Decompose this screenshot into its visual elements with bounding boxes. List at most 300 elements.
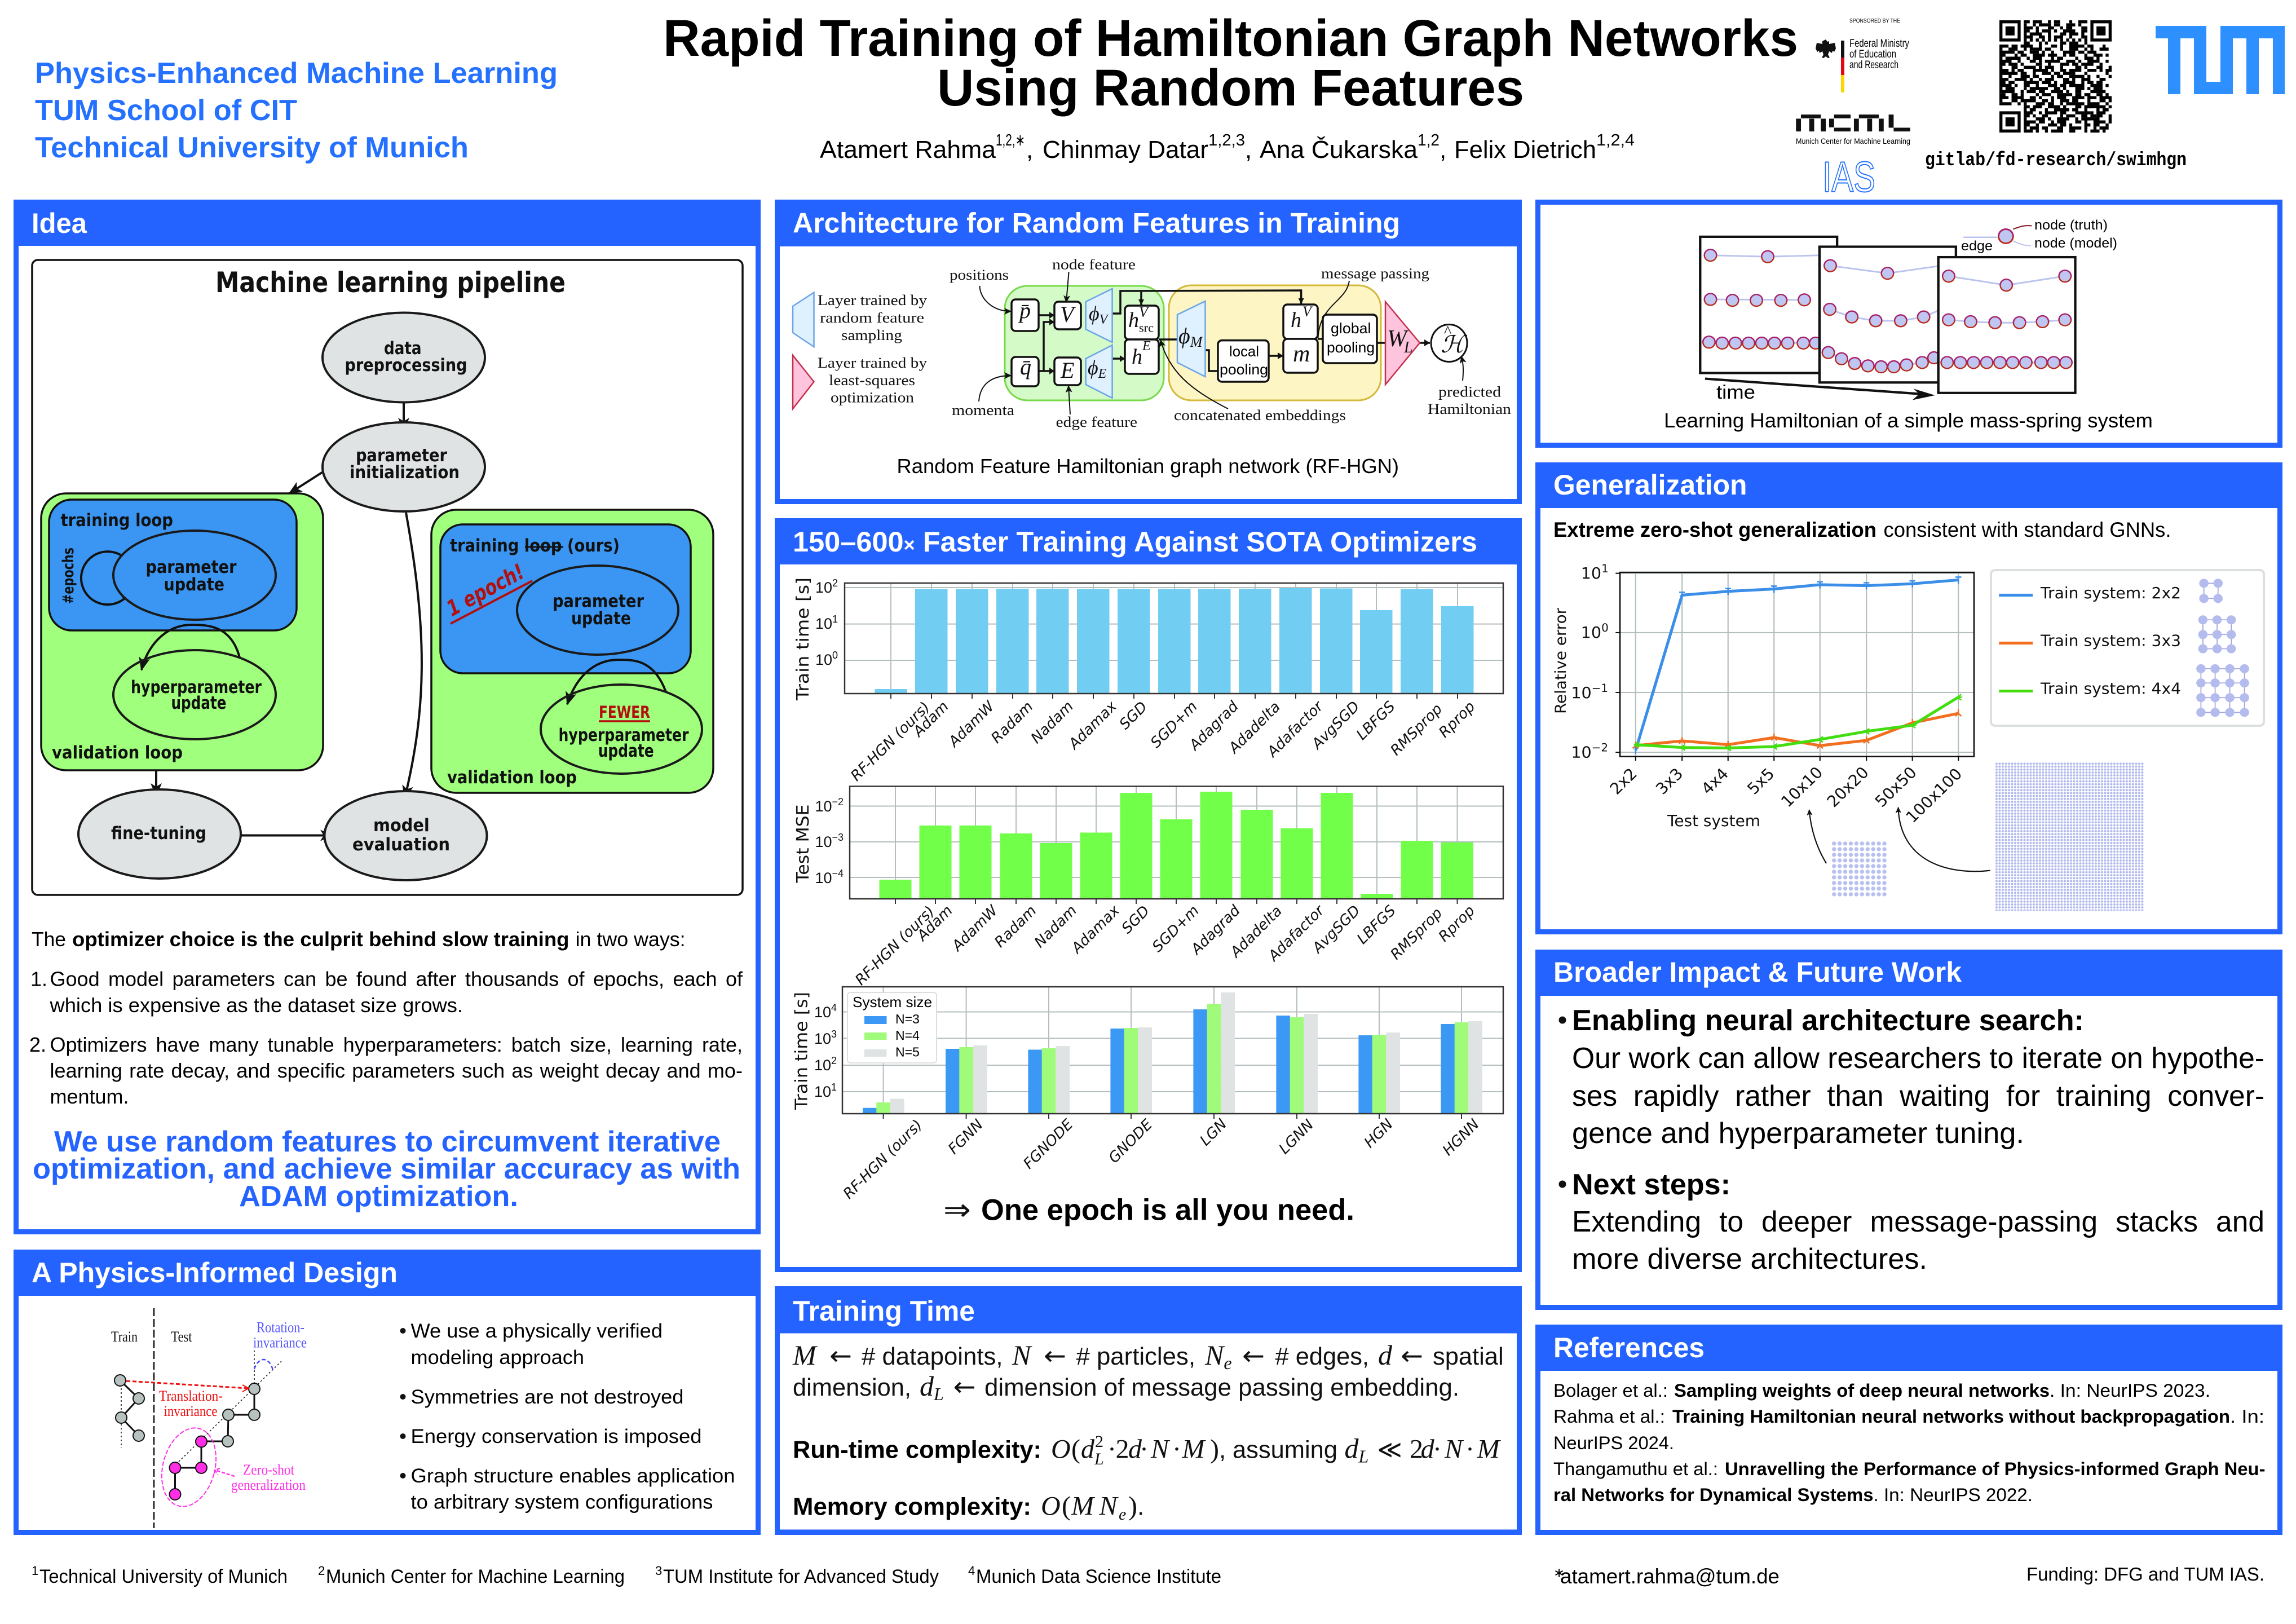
text: variable definitions: d xyxy=(920,1370,934,1402)
diagram: RF-HGN architecture: edge feature xyxy=(1056,414,1137,430)
text: run-time complexity: · xyxy=(1465,1435,1474,1464)
diagram: RF-HGN architecture: E xyxy=(1098,367,1107,381)
list: next steps: Extending to deeper message-passing stacks and xyxy=(1572,1205,2264,1238)
list: neural architecture search: ses rapidly rather than waiting for training conver- xyxy=(1572,1079,2264,1112)
frame: third time step xyxy=(1939,257,2076,393)
text: reference list: Unravelling the Performance of Physics-informed Graph Neu- xyxy=(1725,1459,2266,1479)
panel: mass-spring system xyxy=(1535,200,2282,448)
panel: Broader Impact & Future Work xyxy=(1535,950,2282,1310)
right loop box: our validation loop: 1 epoch! xyxy=(442,559,528,621)
list: neural architecture search: gence and hyperparameter tuning. xyxy=(1572,1116,2024,1149)
logo: Federal Ministry of Education and Research xyxy=(1816,18,1909,92)
bar chart: test MSE by optimizer: −3 xyxy=(832,832,844,843)
text: reference list: Thangamuthu et al.: xyxy=(1553,1459,1718,1479)
node: fine-tuning: fine-tuning xyxy=(111,823,206,844)
node: parameter initialization: initialization xyxy=(350,462,460,483)
authors xyxy=(820,131,1635,164)
bar chart: train time by optimizer: Adam xyxy=(909,698,952,741)
bar chart: train time by model: HGN xyxy=(1361,1116,1397,1151)
legend: system size xyxy=(847,992,937,1063)
diagram: RF-HGN architecture: h xyxy=(1128,308,1139,332)
line chart: relative error vs test system: 4x4 xyxy=(1698,765,1732,798)
authors: 1,2 xyxy=(1418,131,1440,149)
left loop box: validation loop: parameter xyxy=(145,557,237,577)
diagram: RF-HGN architecture: m xyxy=(1293,341,1310,367)
repository link: gitlab/fd-research/swimhgn xyxy=(1925,150,2187,171)
bar chart: train time by model: HGNN xyxy=(1440,1116,1483,1159)
logo: MCML: Munich Center for Machine Learning xyxy=(1796,136,1910,145)
bar chart: test MSE by optimizer: SGD xyxy=(1119,903,1153,937)
right loop box: our validation loop: hyperparameter xyxy=(558,725,689,745)
bar chart: test MSE by optimizer: AvgSGD xyxy=(1309,902,1364,957)
diagram: RF-HGN architecture: ℋ xyxy=(1441,332,1468,358)
callout: key message xyxy=(33,1126,740,1213)
text: memory complexity: Memory complexity: xyxy=(793,1493,1031,1521)
logo: Federal Ministry of Education and Research: and Research xyxy=(1849,59,1898,71)
list: design bullets: Symmetries are not destroyed xyxy=(410,1386,683,1408)
text: reference list: . In: xyxy=(2230,1406,2264,1427)
panel: 150-600x faster training xyxy=(775,518,1522,1272)
legend: train systems: Train system: 3x3 xyxy=(2040,632,2181,650)
heading: Idea: Idea xyxy=(32,208,87,239)
bar chart: train time by model: LGN xyxy=(1197,1116,1230,1149)
bar chart: train time by model: 10 xyxy=(814,1083,831,1100)
diagram: RF-HGN architecture xyxy=(950,256,1511,430)
diagram: RF-HGN architecture: ^ xyxy=(1444,323,1451,341)
left loop box: validation loop: hyperparameter xyxy=(131,677,262,698)
text: generalization summary: consistent with standard GNNs. xyxy=(1883,518,2171,541)
right loop box: our validation loop: FEWER xyxy=(599,703,650,722)
line chart: relative error vs test system: 10 xyxy=(1581,564,1601,582)
line chart: relative error vs test system: 1 xyxy=(1601,562,1609,575)
callout: key message: ADAM optimization. xyxy=(239,1180,518,1213)
bar chart: test MSE by optimizer: LBFGS xyxy=(1354,902,1399,948)
text: variable definitions: e xyxy=(1224,1353,1232,1373)
frame: first time step xyxy=(1700,237,1837,373)
bar chart: train time by optimizer: Rprop xyxy=(1436,698,1478,741)
panel: Architecture for Random Features in Training xyxy=(775,200,1522,504)
logo: Federal Ministry of Education and Research: Federal Ministry xyxy=(1849,38,1909,50)
text: reference list xyxy=(1553,1380,2266,1505)
text: run-time complexity: · xyxy=(1433,1435,1442,1464)
header: institution text: TUM School of CIT xyxy=(35,94,297,127)
diagram: RF-HGN architecture: momenta xyxy=(952,402,1015,418)
text: run-time complexity: L xyxy=(1094,1450,1104,1468)
diagram: RF-HGN architecture: L xyxy=(1403,339,1413,356)
diagram: RF-HGN architecture: E xyxy=(1142,339,1151,354)
diagram: graph symmetries: Translation- xyxy=(159,1388,223,1404)
title xyxy=(663,10,1798,117)
bar chart: train time by model: 10 xyxy=(814,1057,831,1074)
text: memory complexity: . xyxy=(1137,1493,1144,1521)
node: model evaluation: evaluation xyxy=(352,835,450,855)
footer: affiliations: Munich Center for Machine Learning xyxy=(326,1566,625,1587)
legend: layer types xyxy=(793,292,927,409)
node: parameter initialization: parameter xyxy=(356,445,448,466)
text: reference list: NeurIPS 2024. xyxy=(1553,1433,1674,1453)
footer: affiliations: 1 xyxy=(32,1564,38,1578)
diagram: RF-HGN architecture: ϕ xyxy=(1089,302,1100,325)
text: variable definitions xyxy=(792,1339,1504,1404)
text: run-time complexity: d xyxy=(1344,1432,1359,1464)
bar chart: train time by model: 2 xyxy=(831,1055,837,1066)
bar chart: train time by model xyxy=(792,987,1503,1202)
bar chart: test MSE by optimizer: Adam xyxy=(913,902,956,945)
diagram: RF-HGN architecture: V xyxy=(1060,302,1076,327)
right loop box: our validation loop: parameter xyxy=(553,591,644,611)
line chart: relative error vs test system xyxy=(1571,562,1974,827)
bar chart: train time by optimizer: Adamax xyxy=(1065,698,1120,753)
footer: contact email: ∗ xyxy=(1553,1565,1565,1581)
text: optimizer explanation: Good model parameters can be found after thousands of epochs, each of xyxy=(50,968,743,990)
text: run-time complexity: L xyxy=(1358,1446,1368,1466)
node: parameter initialization xyxy=(323,422,485,511)
bar chart: train time by model: FGNODE xyxy=(1020,1116,1077,1172)
text: variable definitions: d xyxy=(1378,1339,1393,1371)
text: reference list: Sampling weights of deep neural networks xyxy=(1674,1380,2050,1401)
bar chart: train time by model: Train time [s] xyxy=(792,992,812,1110)
line chart: relative error vs test system: 10x10 xyxy=(1777,763,1826,811)
text: optimizer explanation: in two ways: xyxy=(576,928,686,951)
text: run-time complexity: O xyxy=(1051,1435,1071,1464)
text: reference list: . In: NeurIPS 2023. xyxy=(2050,1380,2210,1401)
diagram: graph symmetries: Zero-shot xyxy=(243,1462,295,1478)
label: time: time xyxy=(1716,382,1755,403)
text: optimizer explanation: 2. xyxy=(29,1033,46,1056)
text: run-time complexity: M xyxy=(1182,1435,1207,1464)
text: optimizer explanation: learning rate decay, and specific parameters such as weight decay and mo- xyxy=(50,1059,743,1082)
QR code xyxy=(1999,20,2112,133)
footer: affiliations: TUM Institute for Advanced Study xyxy=(663,1566,939,1587)
title: Rapid Training of Hamiltonian Graph Networks xyxy=(663,10,1798,67)
list: design bullets xyxy=(400,1320,735,1513)
diagram: RF-HGN architecture: pooling xyxy=(1220,361,1268,378)
text: variable definitions: N xyxy=(1012,1339,1032,1371)
heading: Architecture: Architecture for Random Features in Training xyxy=(793,208,1400,239)
text: run-time complexity: N xyxy=(1150,1435,1171,1464)
bar chart: train time by model: 1 xyxy=(831,1082,837,1093)
bar chart: train time by optimizer: Nadam xyxy=(1028,698,1077,747)
text: variable definitions: # edges, xyxy=(1275,1343,1369,1370)
text: optimizer explanation: which is expensive as the dataset size grows. xyxy=(49,994,463,1017)
left loop box: validation loop: #epochs xyxy=(60,548,77,604)
diagram: machine learning pipeline xyxy=(32,260,743,895)
left loop box: validation loop: training loop xyxy=(61,510,173,531)
bar chart: train time by optimizer: Radam xyxy=(988,698,1036,747)
right loop box: our validation loop: validation loop xyxy=(447,767,577,788)
legend: train systems: Train system: 4x4 xyxy=(2040,679,2181,698)
line chart: relative error vs test system: 50x50 xyxy=(1871,763,1920,811)
panel: Idea xyxy=(14,200,761,1234)
text: optimizer explanation xyxy=(29,928,743,1108)
text: variable definitions: ← xyxy=(1044,1340,1066,1371)
text: variable definitions: dimension, xyxy=(793,1374,911,1401)
footer: affiliations: 3 xyxy=(655,1564,662,1578)
line chart: relative error vs test system: 20x20 xyxy=(1823,763,1873,811)
bar chart: test MSE by optimizer: SGD+m xyxy=(1149,902,1203,956)
bar chart: test MSE by optimizer: Rprop xyxy=(1436,902,1478,945)
text: variable definitions: spatial xyxy=(1433,1343,1504,1370)
text: variable definitions: M xyxy=(792,1339,818,1371)
text: optimizer explanation: Optimizers have many tunable hyperparameters: batch size, learning rate, xyxy=(50,1033,743,1056)
legend: layer types: sampling xyxy=(841,327,902,343)
diagram: RF-HGN architecture: h xyxy=(1132,345,1142,369)
authors: 1,2,∗ xyxy=(996,131,1025,149)
text: reference list: Bolager et al.: xyxy=(1553,1380,1668,1401)
bar chart: train time by model: FGNN xyxy=(945,1116,987,1158)
bar chart: train time by optimizer: 10 xyxy=(815,579,832,596)
text: variable definitions: ← xyxy=(953,1371,975,1402)
diagram: graph symmetries: invariance xyxy=(164,1403,218,1419)
legend: node and edge xyxy=(1963,226,2032,246)
axis label: test system: Test system xyxy=(1667,811,1760,830)
legend: layer types: Layer trained by xyxy=(818,355,927,371)
text: variable definitions: N xyxy=(1205,1339,1224,1371)
list: design bullets: to arbitrary system configurations xyxy=(410,1491,713,1513)
authors: Chinmay Datar xyxy=(1043,136,1208,164)
bar chart: test MSE by optimizer: Adafactor xyxy=(1265,901,1328,965)
bar chart: train time by model: 4 xyxy=(831,1002,837,1013)
panel: Training Time xyxy=(775,1286,1522,1535)
bar chart: train time by optimizer: SGD+m xyxy=(1147,698,1201,752)
header: institution text xyxy=(35,57,558,164)
diagram: RF-HGN architecture: Hamiltonian xyxy=(1428,401,1511,417)
heading: Generalization: Generalization xyxy=(1553,469,1747,501)
list: design bullets: modeling approach xyxy=(410,1347,584,1369)
line chart: relative error vs test system: −1 xyxy=(1592,682,1608,695)
right loop box: our validation loop: update xyxy=(598,741,654,761)
text: generalization summary: Extreme zero-shot generalization xyxy=(1553,518,1876,541)
node: data preprocessing: data xyxy=(384,338,422,359)
caption: mass-spring: Learning Hamiltonian of a simple mass-spring system xyxy=(1664,409,2153,432)
header: institution text: Physics-Enhanced Machine Learning xyxy=(35,57,558,90)
legend: system size: System size xyxy=(853,994,932,1010)
diagram: graph symmetries: Train xyxy=(111,1329,138,1345)
illustration: large test systems xyxy=(1809,762,2144,911)
text: reference list: Training Hamiltonian neural networks without backpropagation xyxy=(1672,1406,2230,1427)
text: run-time complexity: ) xyxy=(1210,1435,1219,1464)
text: memory complexity: e xyxy=(1119,1505,1126,1524)
bar chart: test MSE by optimizer: RMSprop xyxy=(1388,905,1446,963)
bar chart: train time by optimizer: Adafactor xyxy=(1264,697,1327,761)
diagram: graph symmetries xyxy=(111,1308,307,1528)
caption: RF-HGN: Random Feature Hamiltonian graph network (RF-HGN) xyxy=(897,454,1399,478)
bar chart: train time by optimizer xyxy=(793,577,1503,784)
diagram: RF-HGN architecture: src xyxy=(1139,321,1154,335)
bar chart: train time by optimizer: 10 xyxy=(815,615,832,632)
bar chart: test MSE by optimizer: 10 xyxy=(815,798,832,815)
text: memory complexity: ( xyxy=(1062,1491,1071,1521)
right loop box: our validation loop: training loop (ours) xyxy=(450,536,620,556)
list: neural architecture search: Our work can allow researchers to iterate on hypothe- xyxy=(1572,1042,2264,1074)
authors: Felix Dietrich xyxy=(1454,136,1596,164)
text: memory complexity: M xyxy=(1071,1491,1096,1521)
diagram: RF-HGN architecture: positions xyxy=(950,267,1009,283)
bar chart: train time by model: 10 xyxy=(814,1030,831,1047)
diagram: graph symmetries: generalization xyxy=(231,1477,306,1493)
callout: key message: We use random features to circumvent iterative xyxy=(54,1126,721,1158)
bar chart: test MSE by optimizer: 10 xyxy=(815,870,832,886)
list: design bullets: Graph structure enables application xyxy=(410,1465,735,1487)
logo: Federal Ministry of Education and Research: SPONSORED BY THE xyxy=(1849,18,1900,24)
bar chart: test MSE by optimizer: Test MSE xyxy=(793,804,813,884)
list: neural architecture search xyxy=(1558,1004,2264,1149)
authors: , xyxy=(1440,136,1446,164)
text: optimizer explanation: optimizer choice is the culprit behind slow training xyxy=(72,928,569,951)
bar chart: test MSE by optimizer: Adadelta xyxy=(1226,903,1286,961)
diagram: graph symmetries: Test xyxy=(171,1329,192,1345)
text: run-time complexity: d xyxy=(1081,1435,1095,1464)
arrow: time xyxy=(1705,379,1935,400)
text: variable definitions: dimension of message passing embedding. xyxy=(984,1374,1459,1401)
legend: layer types: optimization xyxy=(831,390,914,406)
text: optimizer explanation: 1. xyxy=(30,968,47,990)
left loop box: validation loop xyxy=(41,493,323,770)
authors: 1,2,4 xyxy=(1596,131,1635,149)
text: variable definitions: L xyxy=(933,1384,944,1404)
axis label: relative error: Relative error xyxy=(1552,607,1570,714)
label: edge: edge xyxy=(1961,239,1993,254)
text: run-time complexity: Run-time complexity: xyxy=(793,1436,1041,1464)
text: memory complexity: N xyxy=(1098,1491,1119,1521)
list: next steps: more diverse architectures. xyxy=(1572,1242,1927,1275)
text: run-time complexity: ≪ xyxy=(1377,1436,1402,1464)
label: node model: node (model) xyxy=(2034,236,2117,251)
line chart: relative error vs test system: 5x5 xyxy=(1743,765,1778,798)
callout: key message: optimization, and achieve similar accuracy as with xyxy=(33,1153,740,1185)
bar chart: test MSE by optimizer: RF-HGN (ours) xyxy=(852,903,938,988)
line chart: relative error vs test system: 10 xyxy=(1581,624,1601,642)
text: run-time complexity: d xyxy=(1128,1435,1142,1464)
text: reference list: Rahma et al.: xyxy=(1553,1406,1665,1427)
bar chart: train time by model: LGNN xyxy=(1276,1116,1317,1158)
panel: References xyxy=(1535,1325,2282,1535)
header: institution text: Technical University of Munich xyxy=(35,131,469,164)
bar chart: train time by optimizer: Adagrad xyxy=(1185,698,1242,754)
list: next steps: Next steps: xyxy=(1572,1168,1730,1201)
text: variable definitions: ← xyxy=(1242,1340,1265,1371)
footer: contact email: atamert.rahma@tum.de xyxy=(1560,1565,1780,1588)
diagram: RF-HGN architecture: V xyxy=(1139,304,1150,320)
text: optimizer explanation: mentum. xyxy=(50,1085,129,1108)
diagram: RF-HGN architecture: h xyxy=(1291,308,1301,332)
diagram: RF-HGN architecture: M xyxy=(1190,334,1203,350)
legend: system size: N=4 xyxy=(895,1028,920,1043)
text: memory complexity xyxy=(793,1491,1144,1524)
bar chart: train time by optimizer: 2 xyxy=(832,577,838,589)
bar chart: train time by model: GNODE xyxy=(1106,1116,1156,1167)
bar chart: test MSE by optimizer: Adagrad xyxy=(1187,902,1244,959)
diagram: RF-HGN architecture: message passing xyxy=(1321,266,1429,282)
bar chart: train time by optimizer: Train time [s] xyxy=(793,577,813,701)
bar chart: test MSE by optimizer: Nadam xyxy=(1031,902,1080,951)
text: run-time complexity: d xyxy=(1421,1435,1435,1464)
list: next steps xyxy=(1558,1168,2264,1275)
line chart: relative error vs test system: 2x2 xyxy=(1606,765,1641,798)
diagram: RF-HGN architecture: V xyxy=(1302,303,1313,320)
footer: affiliations: Munich Data Science Institute xyxy=(976,1566,1221,1587)
text: variable definitions: ← xyxy=(1401,1340,1423,1371)
line chart: relative error vs test system: 100x100 xyxy=(1902,765,1966,827)
diagram: RF-HGN architecture: q̄ xyxy=(1020,354,1031,379)
bar chart: train time by optimizer: RMSprop xyxy=(1388,701,1446,759)
bar chart: train time by model: RF-HGN (ours) xyxy=(840,1116,926,1202)
heading: faster training: 150–600× Faster Training Against SOTA Optimizers xyxy=(793,526,1477,558)
heading: A Physics-Informed Design: A Physics-Informed Design xyxy=(32,1257,398,1288)
left loop box: validation loop: validation loop xyxy=(52,743,183,763)
line chart: relative error vs test system: 3x3 xyxy=(1652,765,1686,798)
diagram: RF-HGN architecture: concatenated embeddings xyxy=(1174,407,1346,423)
text: variable definitions: # datapoints, xyxy=(862,1343,1003,1370)
diagram: RF-HGN architecture: node feature xyxy=(1052,256,1136,273)
authors: Atamert Rahma xyxy=(820,136,996,164)
legend: layer types: random feature xyxy=(820,310,924,326)
pipeline arrows xyxy=(156,402,422,836)
authors: , xyxy=(1245,136,1252,164)
label: node truth: node (truth) xyxy=(2034,218,2108,233)
diagram: RF-HGN architecture: local xyxy=(1229,343,1259,360)
bar chart: train time by optimizer: RF-HGN (ours) xyxy=(847,699,933,784)
node: data preprocessing xyxy=(323,312,485,403)
text: run-time complexity: , xyxy=(1219,1436,1226,1464)
bar chart: train time by optimizer: 10 xyxy=(815,651,832,668)
text: memory complexity: O xyxy=(1041,1491,1061,1521)
text: run-time complexity xyxy=(793,1432,1502,1468)
right loop box: our validation loop xyxy=(431,510,713,793)
diagram: RF-HGN architecture: predicted xyxy=(1438,384,1501,400)
bar chart: test MSE by optimizer: 10 xyxy=(815,833,832,850)
authors: , xyxy=(1026,136,1033,164)
bar chart: train time by optimizer: AvgSGD xyxy=(1308,698,1363,753)
legend: system size: N=5 xyxy=(895,1044,920,1059)
bar chart: test MSE by optimizer: AdamW xyxy=(948,902,1002,955)
diagram: mass-spring frames over time xyxy=(1700,226,2076,400)
bar chart: test MSE by optimizer xyxy=(793,786,1503,988)
bar chart: test MSE by optimizer: −4 xyxy=(832,868,844,879)
left loop box: validation loop: update xyxy=(171,693,227,713)
diagram: RF-HGN architecture: p̄ xyxy=(1018,298,1031,323)
text: memory complexity: ) xyxy=(1128,1491,1137,1521)
text: run-time complexity: assuming xyxy=(1233,1436,1337,1464)
footer: affiliations: 4 xyxy=(968,1564,975,1578)
text: optimizer explanation: The xyxy=(32,928,66,951)
diagram: machine learning pipeline: Machine learning pipeline xyxy=(215,266,566,299)
text: run-time complexity: 2 xyxy=(1095,1432,1103,1451)
text: variable definitions: ← xyxy=(829,1340,852,1371)
title: Using Random Features xyxy=(937,59,1524,117)
diagram: RF-HGN architecture: E xyxy=(1060,358,1074,383)
bar chart: train time by optimizer: LBFGS xyxy=(1353,698,1399,744)
footer: affiliations: 2 xyxy=(318,1564,325,1578)
authors: 1,2,3 xyxy=(1208,131,1245,149)
heading: Training Time: Training Time xyxy=(793,1295,975,1327)
bar chart: train time by optimizer: 1 xyxy=(832,614,838,625)
legend: layer types: Layer trained by xyxy=(818,292,927,308)
diagram: RF-HGN architecture: ϕ xyxy=(1088,356,1098,379)
panel: A Physics-Informed Design xyxy=(14,1250,761,1535)
bar chart: train time by optimizer: AdamW xyxy=(945,698,999,751)
text: run-time complexity: M xyxy=(1477,1435,1502,1464)
legend: layer types: least-squares xyxy=(829,372,915,389)
diagram: RF-HGN architecture: pooling xyxy=(1327,339,1375,356)
list: design bullets: Energy conservation is imposed xyxy=(410,1426,701,1448)
logo: Federal Ministry of Education and Research: of Education xyxy=(1849,48,1896,60)
text: run-time complexity: 2 xyxy=(1115,1435,1129,1464)
legend: train systems xyxy=(1991,570,2264,726)
legend: train systems: Train system: 2x2 xyxy=(2040,584,2181,602)
bar chart: train time by optimizer: SGD xyxy=(1116,699,1151,733)
left loop box: validation loop: update xyxy=(164,575,224,595)
